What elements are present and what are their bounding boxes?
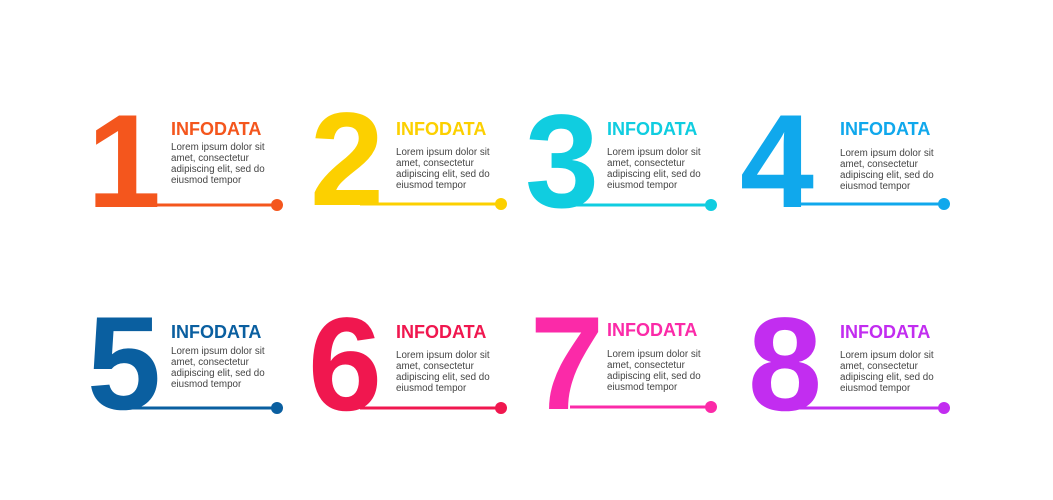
item 7: amet, consectetur bbox=[607, 360, 686, 371]
item 5: 5 bbox=[87, 290, 161, 438]
item 5: adipiscing elit, sed do bbox=[171, 368, 265, 379]
item 5: Lorem ipsum dolor sit bbox=[171, 346, 265, 357]
item 7: 7 bbox=[530, 290, 604, 438]
item 3: adipiscing elit, sed do bbox=[607, 169, 701, 180]
item 5 bbox=[87, 290, 283, 438]
item 2: amet, consectetur bbox=[396, 158, 475, 169]
item 1: Lorem ipsum dolor sit bbox=[171, 142, 265, 153]
item 1: adipiscing elit, sed do bbox=[171, 164, 265, 175]
item 3: eiusmod tempor bbox=[607, 180, 678, 191]
item 1: INFODATA bbox=[171, 119, 261, 139]
item 3: INFODATA bbox=[607, 119, 697, 139]
item 4: INFODATA bbox=[840, 119, 930, 139]
item 2: Lorem ipsum dolor sit bbox=[396, 147, 490, 158]
item 1: amet, consectetur bbox=[171, 153, 250, 164]
item 7: adipiscing elit, sed do bbox=[607, 371, 701, 382]
item 1: 1 bbox=[87, 88, 161, 236]
item 2: 2 bbox=[310, 86, 384, 234]
item 8: Lorem ipsum dolor sit bbox=[840, 350, 934, 361]
item 1: eiusmod tempor bbox=[171, 175, 242, 186]
item 2: adipiscing elit, sed do bbox=[396, 169, 490, 180]
item 5: INFODATA bbox=[171, 322, 261, 342]
item 8: 8 bbox=[748, 291, 822, 439]
item 8: amet, consectetur bbox=[840, 361, 919, 372]
item 6: eiusmod tempor bbox=[396, 383, 467, 394]
item 2: INFODATA bbox=[396, 119, 486, 139]
item 5: eiusmod tempor bbox=[171, 379, 242, 390]
item 7: eiusmod tempor bbox=[607, 382, 678, 393]
item 6: 6 bbox=[308, 291, 382, 439]
item 8: INFODATA bbox=[840, 322, 930, 342]
item 6: Lorem ipsum dolor sit bbox=[396, 350, 490, 361]
item 6 bbox=[308, 291, 507, 439]
item 4: Lorem ipsum dolor sit bbox=[840, 148, 934, 159]
item 2 bbox=[310, 86, 507, 234]
item 7: INFODATA bbox=[607, 320, 697, 340]
item 6: amet, consectetur bbox=[396, 361, 475, 372]
item 2: eiusmod tempor bbox=[396, 180, 467, 191]
item 3: 3 bbox=[525, 88, 599, 236]
item 4: 4 bbox=[740, 88, 814, 236]
item 6: INFODATA bbox=[396, 322, 486, 342]
item 8 bbox=[748, 291, 950, 439]
item 7 bbox=[530, 290, 717, 438]
item 3: amet, consectetur bbox=[607, 158, 686, 169]
item 5: amet, consectetur bbox=[171, 357, 250, 368]
item 3 bbox=[525, 88, 717, 236]
item 1 bbox=[87, 88, 283, 236]
item 8: eiusmod tempor bbox=[840, 383, 911, 394]
item 8: adipiscing elit, sed do bbox=[840, 372, 934, 383]
item 4: adipiscing elit, sed do bbox=[840, 170, 934, 181]
item 3: Lorem ipsum dolor sit bbox=[607, 147, 701, 158]
item 4: amet, consectetur bbox=[840, 159, 919, 170]
item 6: adipiscing elit, sed do bbox=[396, 372, 490, 383]
item 4: eiusmod tempor bbox=[840, 181, 911, 192]
item 7: Lorem ipsum dolor sit bbox=[607, 349, 701, 360]
item 4 bbox=[740, 88, 950, 236]
